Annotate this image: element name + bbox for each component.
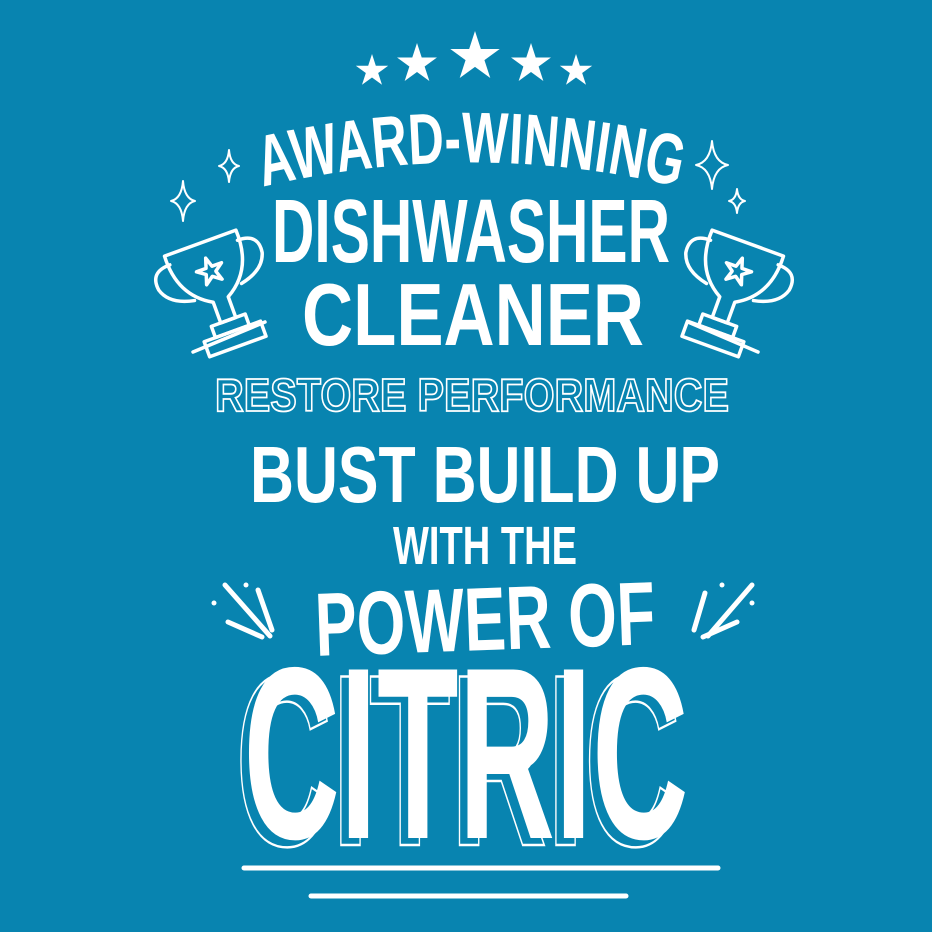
icon: left burst: [212, 582, 272, 637]
icon: five stars: [356, 31, 592, 85]
icon: sparkles: [171, 141, 745, 221]
decorative underlines: [244, 868, 718, 896]
heading: dishwasher: DISHWASHER: [272, 182, 670, 282]
heading: cleaner: CLEANER: [302, 265, 644, 364]
icon: right burst: [694, 582, 754, 637]
icon: right trophy: [658, 224, 800, 365]
icon: left trophy: [148, 224, 290, 365]
subheading: bust build up: BUST BUILD UP: [250, 430, 720, 519]
trophy base lines: [193, 322, 758, 352]
text: with the: WITH THE: [393, 516, 577, 576]
heading: citric: [236, 616, 688, 897]
subheading: restore performance: RESTORE PERFORMANCE: [215, 369, 729, 421]
heading: power of: POWER OF: [313, 564, 657, 676]
heading: award-winning: AWARD-WINNING: [264, 112, 684, 186]
